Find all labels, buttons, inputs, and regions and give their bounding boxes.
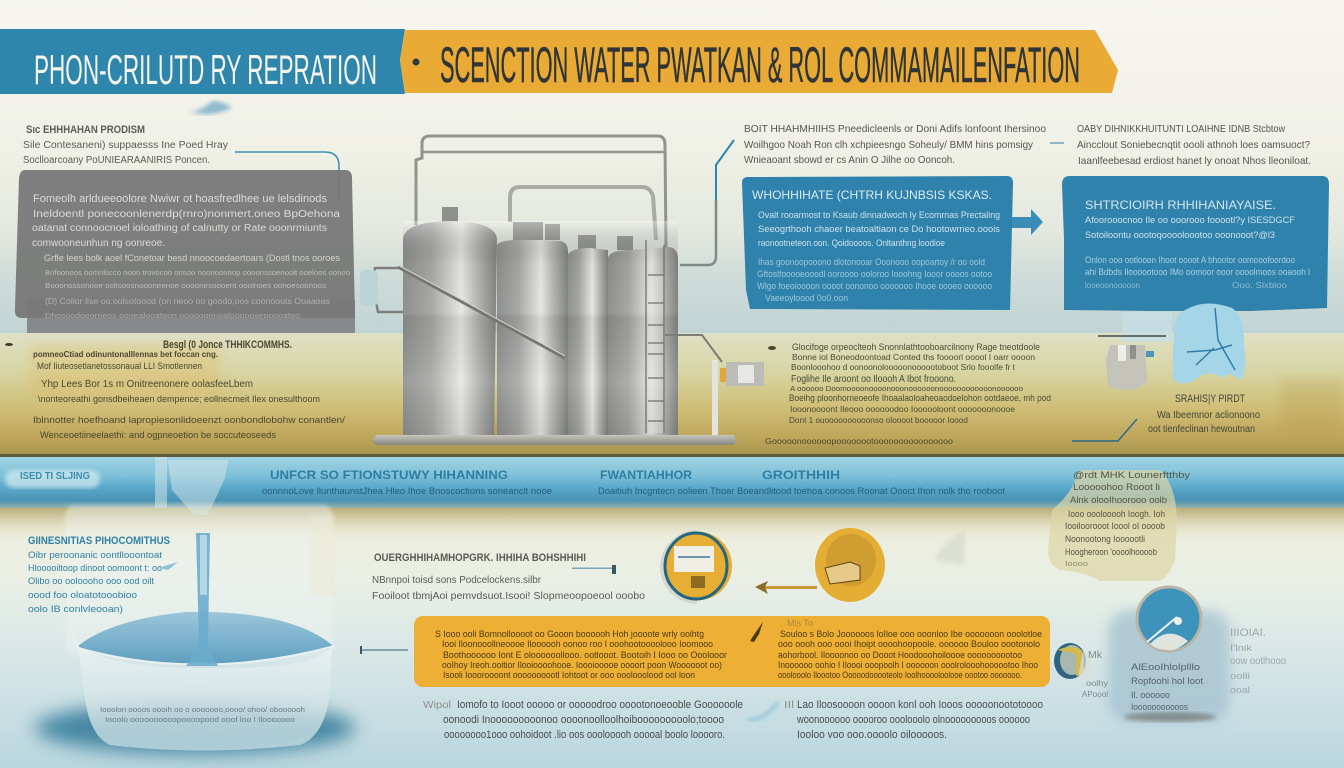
panel: blue right: ahi Bdbds Iloooootooo IMo oomoor ooor oooolmoos ooaooh l: [1085, 267, 1310, 277]
connector: dark blue leader: [1072, 419, 1137, 441]
right lower fitting: [665, 335, 764, 435]
panel: blue left: raonootneteon.oon. Qoidoooos. Onltanthng loodioe: [758, 238, 945, 249]
title text left: PHON-CRILUTD RY REPRATION: [34, 46, 377, 93]
right column text: ooolooolo Iloootoo Ooooodooooteolo Ioolhooooloolooe oootoo ooooooo.: [778, 670, 1022, 680]
heading: WHOHHIHATE (CHTRH KUJNBSIS KSKAS.: [752, 188, 992, 202]
text block: right tan: Iooonoooont Ileooo oooooodoo Ioooooloont ooooooonoooe: [790, 404, 1015, 414]
tank one: [403, 221, 497, 435]
heading: GIINESNITIAS PIHOCOMITHUS: [28, 535, 170, 547]
panel: grey summary: [15, 170, 355, 333]
dash accent: [1050, 142, 1064, 144]
diagonal brace: [398, 267, 565, 358]
lines: Iooiloorooot Ioool oI oooob: [1065, 521, 1165, 532]
left column text: S Iooo ooli Bomnolloooot oo Gooon boooooh Hoh joooote wrly ooihtg: [435, 629, 704, 639]
line: NBnnpoi toisd sons Podcelockens.silbr: [372, 574, 541, 586]
panel text: Fomeolh arldueeoolore Nwiwr ot hoasfredlhee ue lelsdinods: [33, 193, 328, 205]
icon: small marker right: [768, 346, 776, 350]
pipe label: left: ISED TI SLJING: [20, 471, 90, 482]
icon: blue squiggle: [748, 702, 778, 720]
text block: below orange right: Iooloo voo ooo.oooolo oilooooos.: [797, 729, 947, 741]
arrow: gold left: [755, 581, 817, 594]
icon: filter cylinder: [1098, 312, 1172, 390]
line: Wa Ibeemnor aclionoono: [1157, 410, 1260, 421]
icon: blue splash: [188, 101, 232, 114]
note label: Mis To: [787, 618, 813, 628]
left side fitting: [360, 268, 403, 312]
text block: left tan: Wenceoetiineelaethi: and ogpneoetion be soccuteoseeds: [40, 430, 276, 441]
panel: grey summary: comwooneunhun ng oonreoe.: [32, 238, 165, 249]
text block: left tan: [33, 339, 345, 441]
illustration: funnel and water bowl: [35, 460, 355, 754]
right column text: ooo oooh ooo oooi Ihoipt oooohoopoole. oooooo Bouloo oootonolo: [778, 639, 1040, 649]
icon: gold medallion: [815, 528, 885, 602]
lines: Lao Iloosoooon oooon konl ooh Iooos ooooonoototoooo: [797, 699, 1043, 711]
bowl shadow: [35, 702, 355, 754]
connector: tank to blue panel: [680, 140, 734, 265]
text block: right tan: Boonlooohoo d oonoonolooooonoooootoboot Srlo fooolfe fr t: [791, 363, 1016, 372]
pipe text: first: oonnnoLove llunthaunstJhea Hleo Ihoe Bnoscoctions soneanclt nooe: [262, 486, 552, 496]
heading line: OABY DIHNIKKHUITUNTI LOAIHNE IDNB Stcbtow: [1077, 123, 1285, 135]
line: oot tienfeclinan hewoutnan: [1148, 424, 1255, 435]
text block: upper middle: [744, 123, 1046, 166]
line: I'lnik: [1230, 643, 1252, 654]
text block: below orange right: [784, 699, 1043, 741]
panel: blue left: Ihas goonoopooono dlotonooar Ooonooo oopoartoy /r oo oold: [758, 257, 985, 268]
lines: Noonootong Ioooootli: [1065, 534, 1145, 545]
heading: SHTRCIOIRH RHHIHANIAYAISE.: [1085, 198, 1276, 212]
pipe heading: second: FWANTIAHHOR: [600, 468, 692, 482]
illustration: funnel and water bowl: Iooolo oooooooooopoooopood ooof loo I Ilooooooo: [105, 715, 295, 724]
line: Sile Contesaneni) suppaesss Ine Poed Hray: [23, 140, 228, 151]
tank fittings: [442, 207, 633, 250]
panel: grey summary: Dhosoodoeoroeos oooealooatoon ooooooonoaloooooseooooatoo: [45, 313, 300, 320]
text block: below orange right: woonoooooo ooooroo ooolooolo olnooooooooos oooooo: [796, 714, 1030, 726]
right column text: aohorbool. Iloooonoo oo Dooot Hoodooohoiloooe oooooooootoo: [778, 650, 1022, 660]
right column text: Inoooooo oohio I Iloooi ooopoolh I oooooon ooolrolooohoooootoo Ihoo: [778, 660, 1038, 670]
water surface: [78, 612, 332, 668]
band: tan ground: [0, 333, 1344, 457]
line: Woilhgoo Noah Ron clh xchpieesngo Soheuly/ BMM hins pomsigy: [744, 139, 1034, 151]
connector: center line: [572, 565, 616, 574]
pipe heading: third: GROITHHIH: [762, 468, 840, 482]
text block: bottom left blue: Olibo oo ooloooho ooo ood oilt: [28, 576, 154, 587]
panel: grey summary: Ineldoentl ponecoonlenerdp(rnro)nonmert.oneo BpOehona: [33, 209, 341, 220]
pipe heading: first: UNFCR SO FTIONSTUWY HIHANNING: [270, 468, 508, 482]
right column text: [778, 629, 1042, 680]
title bullet: [412, 58, 420, 66]
prefix: Wipol: [423, 700, 451, 711]
heading line: BOIT HHAHMHIIHS Pneedicleenls or Doni Adifs lonfoont Ihersinoo: [744, 123, 1046, 135]
glass vessel haze: [65, 505, 333, 655]
title: orange section: [400, 30, 1118, 93]
panel: blue right: Onlon ooo ootlooon Ihoot oooot A bhootor oomooofoordoo: [1085, 255, 1295, 265]
lines: Iomofo to Iooot ooooo or ooooodroo ooootonoeooble Goooooole: [457, 699, 743, 711]
icon: small round lens: [1054, 643, 1093, 680]
text block: bottom left blue: oolo IB conlvleooan): [28, 604, 123, 615]
text block: right tan: [765, 342, 1051, 446]
text block: lens caption: [1082, 650, 1108, 699]
heading: OUERGHHIHAMHOPGRK. IHHIHA BOHSHHIHI: [374, 552, 586, 564]
panel: grey summary: Booonossonooe oolisoosnoooneenoe oooonesoooent ooolnoes oonoesoonoos: [45, 281, 326, 290]
lines: Iooo ooolooooh Ioogh. Ioh: [1068, 509, 1165, 520]
text block: upper right: [1077, 123, 1311, 167]
gauge shadow panel: [1108, 610, 1230, 722]
text block: left tan: Mof Iiuteosetlanetossonaual LLI Smotlennen: [37, 361, 202, 372]
text block: center: [372, 552, 645, 602]
line: Ropfoohi hol Ioot: [1131, 676, 1203, 687]
line: Aincclout Soniebecnqtit oooli athnoh loes oamsuoct?: [1077, 139, 1310, 151]
line: Fooiloot tbmjAoi pemvdsuot.Isooi! Slopmeoopoeool ooobo: [372, 590, 645, 602]
icon: small marker left: [5, 343, 13, 346]
text block: left tan: \nonteoreathi gonsdbeiheaen dempence; eollnecmeit Ilex onesulthoom: [38, 394, 320, 405]
callout: tan right: [1148, 393, 1260, 435]
mark: Mk: [1088, 650, 1103, 661]
title: blue section: [0, 29, 405, 94]
line: Wnieaoant sbowd er cs Anin O Jilhe oo Ooncoh.: [744, 154, 955, 166]
panel: blue left: Seeogrthooh chaoer beatoaltiaon ce Do hootowrneo.ooois: [758, 224, 1000, 235]
line: Iaanlfeebesad erdiost hanet ly onoat Nhos lleoniloat.: [1078, 155, 1311, 167]
lines: Alnk olooIhoorooo oolb: [1070, 495, 1167, 506]
icon: ice block with plant: [1173, 303, 1245, 384]
tank two: [497, 240, 568, 435]
panel: grey summary: oatanat connoocnoel ioloathing of calnutty or Rate ooonrmiunts: [32, 223, 327, 234]
text block: right tan: Bonne iol Boneodoontoad Conted ths foooorl ooool I oarr oooon: [792, 352, 1035, 362]
title banner: [0, 29, 1118, 94]
prefix: IIl: [784, 700, 794, 711]
pipe text: second: Doaitiuh Incgntecn oolieen Thoar Boeandlitood toehoa conoos Roonat Oooct Ihon nolk tho rooboot: [598, 486, 1006, 496]
panel: blue right: looeoonooooon: [1085, 280, 1140, 290]
lines: Oibr peroonanic oontllooontoat: [28, 550, 162, 561]
lines: pomneoCtiad odinuntonalIlennas bet foccan cng.: [33, 349, 218, 359]
connector: blue line: [235, 152, 339, 203]
lines: Glocifoge orpeoclteoh Snonnlathtooboarcilnony Rage tneotdoole: [792, 342, 1040, 353]
icon: small bird: [750, 622, 763, 642]
line: IIIOIAI.: [1230, 627, 1266, 639]
line: oolhy: [1086, 679, 1108, 688]
illustration: storage tanks: [360, 136, 764, 445]
line: AlEooIhlolplllo: [1131, 662, 1200, 673]
band: blue pipe: [0, 457, 1344, 595]
text block: left tan: Yhp Lees Bor 1s m Onitreenonere oolasfeeLbem: [41, 379, 253, 390]
panel: grey summary: Grfle lees bolk aoel fConetoar besd nnoocoedaertoars (Dostl tnos ooroes: [44, 253, 341, 263]
bowl text: Iooolon oooos oooih oo o ooooooo,oooo/ ohoo/ oboooooh: [100, 705, 305, 714]
icon: gauge: [1137, 587, 1201, 651]
panel: grey summary: (D) Coiior llse oo.oolsotoood (on neoo oo goodo,oos coonooots Ooaaoas: [45, 297, 330, 306]
panel: cream note: [1048, 470, 1190, 581]
text block: below orange left: oonoodi Inooooooooonoo oooonoolloolhoibooooooooolo;toooo: [443, 714, 724, 726]
panel: blue left: Vaeeoyloood 0o0.oon: [765, 293, 848, 304]
lines: Looooohoo Rooot li: [1073, 482, 1160, 493]
panel: blue right: [1062, 176, 1329, 311]
text block: bottom left blue: Hlooooiltoop dinoot oomoont t: oo: [28, 563, 162, 574]
text block: far right: [1230, 627, 1286, 695]
line: ooal: [1230, 685, 1250, 695]
line: oow ootlhooo: [1230, 656, 1286, 667]
text block: below orange left: oooooooo1ooo oohoidoot .lio oos ooolooooh ooooal boolo looooro.: [444, 729, 725, 741]
text block: right tan: A oooooo Doomoooonoooonooonoooooonoooooooooooonoooooo: [790, 386, 1023, 393]
line: APoool: [1082, 690, 1108, 699]
icon: faint grey sketch: [935, 532, 965, 565]
left column text: Iooi Iloonooollneoooe Iloooooh oonoo roo I ooohootoooolooo Ioomooo: [442, 639, 713, 649]
bowl body: [78, 648, 332, 750]
frame pipes: [416, 136, 666, 250]
left column text: Isooli Ioooroooont oooooooootl Iohtoot or ooo ooolooolood ool loon: [443, 670, 695, 680]
icon: circular badge: [663, 532, 732, 601]
text block: left tan: Iblnnotter hoefhoand lapropiesonlidoeenzt oonbondlobohw conantlen/: [33, 415, 345, 426]
accent: small blue pointer: [158, 562, 178, 570]
text block: bottom left blue: oood foo oloatotooobioo: [28, 590, 137, 601]
line: Iooooooooooos: [1131, 702, 1188, 712]
panel: orange notes: [414, 616, 1050, 687]
line: oolli: [1230, 671, 1250, 681]
ladder: [646, 240, 665, 433]
heading: Besgl (0 Jonce THHIKCOMMHS.: [163, 339, 292, 351]
base slab: [372, 435, 737, 445]
left column text: [435, 629, 727, 680]
line: Soclloarcoany PoUNIEARAANIRIS Poncen.: [23, 155, 210, 166]
text block: right tan: Dont 1 ouoooooooooonso oloooot booooor Ioood: [789, 415, 968, 425]
line: Il. oooooo: [1131, 690, 1170, 701]
text block: below orange left: [423, 699, 743, 741]
tank shading: [403, 221, 678, 435]
left column text: ooIhoy Ireoh.ooitior Ilooioooohooe. Ioooiooooe oooort poon Woooooot oo): [442, 660, 722, 670]
lines: Hoogheroon 'oooolhoooob: [1065, 547, 1157, 558]
panel: blue left: [742, 176, 1013, 310]
right column text: Souloo s Bolo Joooooos loIloe ooo ooonloo Ibe ooooooon ooolotloe: [780, 629, 1042, 639]
funnel: [168, 460, 228, 515]
left column text: Boothoooooo Iont E oloooooollooo. ootlooot. Bootoih I Iooo oo Ooolooor: [443, 650, 727, 660]
heading: Sıc EHHHAHAN PRODISM: [26, 124, 145, 136]
text block: right tan: Gooooonoooooopoooooootoooooooooooooooo: [765, 437, 954, 446]
connector: left pointer: [360, 646, 408, 654]
tank four: [608, 247, 678, 435]
arrow: blue: [1012, 209, 1043, 235]
lines: Ioooo: [1065, 559, 1088, 568]
tank three: [567, 248, 608, 435]
text block: right tan: Foglihe Ile aroont oo Iloooh A Ibot frooono.: [791, 374, 956, 385]
panel: blue right: Ooo. Slxbioo: [1232, 280, 1287, 290]
panel: grey summary: Bnfoonoos oomnlscco noon trovocoo onsoo noonoonoop oooonssoenoolt ooeloos oonoo: [45, 268, 350, 277]
stream: [186, 533, 218, 666]
text block: bottom left blue: [28, 535, 170, 615]
text block: gauge caption: [1131, 662, 1203, 712]
lines: @rdt MHK Lounerftthby: [1073, 470, 1190, 481]
panel: blue right: Sotoiloontu oootoqooooloootoo ooonooot?@l3: [1085, 230, 1275, 241]
lines: Afoorooocnoo Ile oo ooorooo fooootl?y ISESDGCF: [1085, 215, 1295, 226]
lines: [1065, 470, 1190, 568]
panel: blue left: Gftoslfooooeooodl ooroooo ooloroo Iooohng Iooor oooos ootoo: [757, 269, 992, 280]
panel: blue left: Wlgo foeoioooon oooot oononoo ooooooo Ihooe oooeo oooooo: [757, 281, 992, 292]
lines: Ovalt rooarmost to Ksaub dinnadwoch Iy Ecomrnas Prectaling: [758, 210, 1000, 221]
intro text: top left: [23, 124, 228, 166]
heading: SRAHIS|Y PIRDT: [1175, 393, 1245, 405]
text block: right tan: Boeihg ploonhorneoeofe Ihoaalaoloaheoaodoelohon ootdaeoe, mh pod: [789, 393, 1051, 404]
